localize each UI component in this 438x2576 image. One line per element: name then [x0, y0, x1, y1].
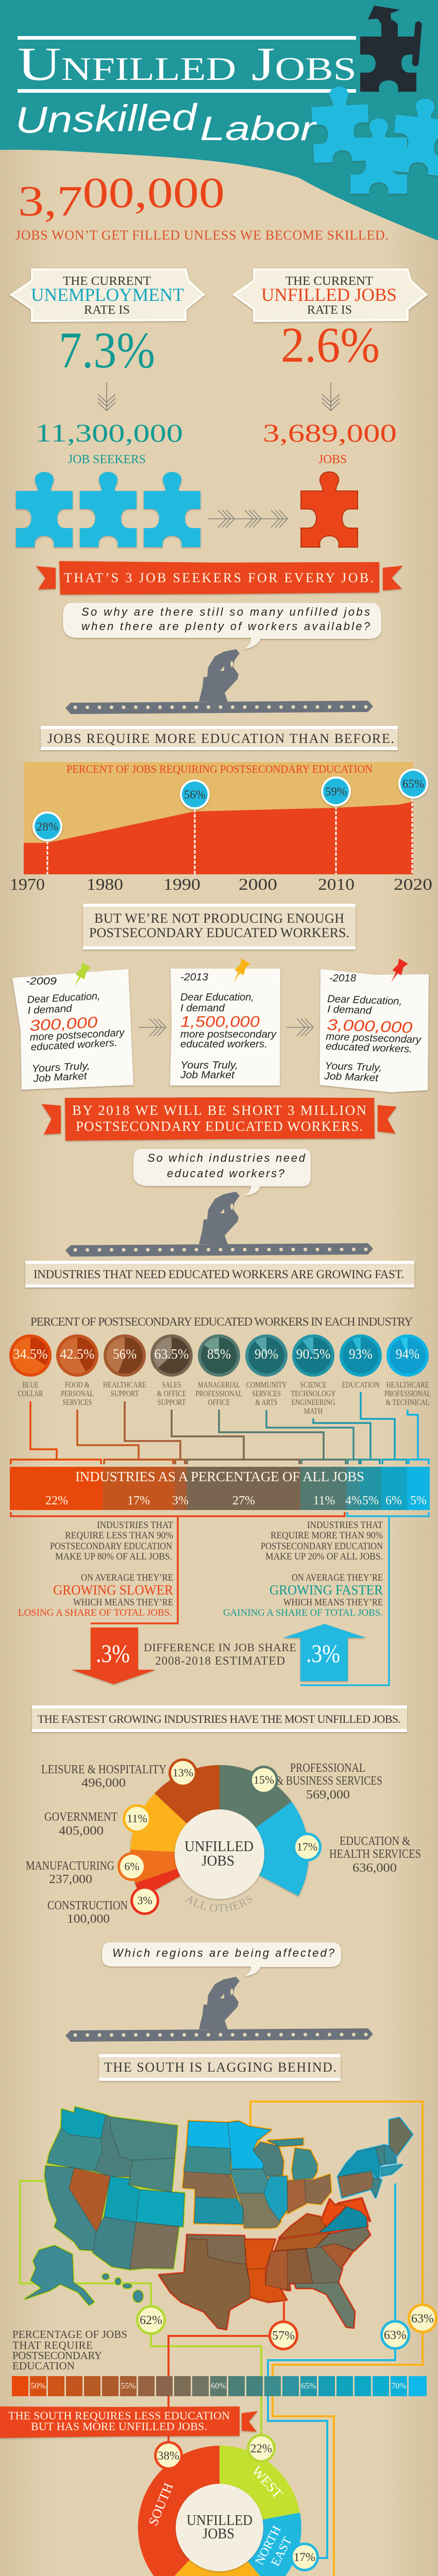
labels: 405,000 [59, 1824, 104, 1838]
panel: unfilled jobs rate [234, 269, 426, 466]
pie education: 93% [349, 1346, 373, 1362]
industry labels: SALES [162, 1381, 181, 1389]
heading: industries growing fast: INDUSTRIES THAT NEED EDUCATED WORKERS ARE GROWING FAST. [33, 1268, 404, 1281]
text: industries more than 90%: WHICH MEANS THEY’RE [283, 1597, 383, 1608]
connector: west [20, 2181, 261, 2435]
donut chart: unfilled jobs by industry: JOBS [201, 1853, 234, 1869]
note text: more postsecondary [180, 1029, 277, 1040]
text: industries less than 90%: INDUSTRIES THAT [97, 1520, 173, 1531]
bar title: INDUSTRIES AS A PERCENTAGE OF ALL JOBS [75, 1469, 364, 1484]
note text: I demand [327, 1004, 372, 1016]
arrow down [322, 383, 340, 411]
wedge northeast [220, 2513, 301, 2576]
note text: Dear Education, [180, 992, 254, 1003]
pie food: 42.5% [60, 1346, 95, 1362]
heading: south lagging: THE SOUTH IS LAGGING BEHIND. [104, 2060, 336, 2075]
map midwest region [183, 2121, 331, 2228]
note text: Yours Truly, [31, 1060, 90, 1075]
3,700,000: 3,7 [18, 177, 82, 225]
banner text: THAT’S 3 JOB SEEKERS FOR EVERY JOB. [64, 570, 374, 585]
map legend title: EDUCATION [12, 2360, 75, 2372]
badge: northeast 63% [380, 2320, 410, 2350]
teal curved panel [0, 0, 438, 241]
panel: unfilled jobs rate: UNFILLED JOBS [261, 284, 397, 305]
chart title: percent in each industry: PERCENT OF POSTSECONDARY EDUCATED WORKERS IN EACH INDUSTRY [30, 1315, 413, 1328]
note text: 1,500,000 [180, 1013, 260, 1030]
59% marker [321, 776, 351, 806]
text: industries less than 90%: WHICH MEANS THEY’RE [73, 1597, 173, 1608]
arrow down [98, 383, 115, 411]
centre text: UNFILLED [184, 1838, 254, 1855]
note: 2018 [319, 958, 429, 1092]
note text [324, 973, 422, 1084]
year axis: 1990 [163, 875, 200, 893]
title rule top [18, 36, 356, 40]
map legend scale: 70% [391, 2382, 407, 2391]
bracket: less than 90% [11, 1512, 345, 1623]
donut chart: unfilled jobs by industry [26, 1758, 421, 1926]
2.6%: 2.6% [281, 317, 380, 373]
connector: northeast [268, 2183, 395, 2558]
donut chart: unfilled jobs by industry: ALL OTHERS [185, 1895, 252, 1912]
note text: Yours Truly, [325, 1060, 382, 1074]
difference caption: 2008-2018 ESTIMATED [155, 1654, 285, 1667]
arrow right [208, 510, 288, 528]
17% badge: 17% [294, 2551, 315, 2564]
heading: jobs require more education [41, 726, 398, 750]
difference caption [144, 1641, 296, 1667]
heading: jobs require more education: JOBS REQUIRE MORE EDUCATION THAN BEFORE. [47, 731, 394, 746]
note: 2009 [12, 962, 133, 1090]
arrow note 2 to 3 [287, 1019, 313, 1036]
arrow down: -.3% [72, 1628, 156, 1684]
note text: Job Market [324, 1071, 379, 1084]
bubble text: Which regions are being affected? [112, 1946, 335, 1959]
text: industries less than 90%: POSTSECONDARY EDUCATION [50, 1541, 172, 1552]
industry labels: COMMUNITY [246, 1381, 287, 1389]
industry labels: FOOD & [65, 1381, 90, 1389]
panel: unfilled jobs rate: RATE IS [307, 303, 352, 317]
text: industries more than 90%: MAKE UP 20% OF ALL JOBS. [265, 1551, 383, 1562]
pie community [245, 1334, 288, 1377]
note text: 3,000,000 [327, 1016, 413, 1037]
note text: 300,000 [29, 1014, 98, 1035]
centre circle [176, 2484, 263, 2571]
map south region [159, 2198, 370, 2329]
speech bubble 2: educated workers? [167, 1167, 285, 1180]
labels: & BUSINESS SERVICES [276, 1774, 382, 1788]
bar values [45, 1494, 427, 1507]
note text: -2013 [180, 972, 208, 983]
note text: -2009 [26, 976, 57, 987]
28% marker [32, 811, 62, 841]
centre circle [175, 1809, 264, 1899]
thinker statue 2 [65, 1192, 373, 1257]
13% badge: 13% [173, 1766, 193, 1779]
pie food [56, 1334, 98, 1377]
heading: fastest growing: THE FASTEST GROWING INDUSTRIES HAVE THE MOST UNFILLED JOBS. [38, 1713, 401, 1725]
text: industries more than 90%: POSTSECONDARY EDUCATION [261, 1541, 383, 1552]
pie community: 90% [255, 1346, 278, 1362]
pie healthcare support [104, 1334, 146, 1377]
text: industries more than 90%: INDUSTRIES THAT [307, 1520, 383, 1531]
area chart: percent of jobs requiring postsecondary education [10, 762, 432, 893]
speech bubble 1 [63, 603, 381, 649]
note text: -2018 [329, 973, 356, 984]
bar values: 5% [410, 1494, 427, 1507]
11,300,000: 11,300,000 [35, 418, 183, 447]
donut chart: unfilled jobs by region [138, 2434, 319, 2576]
65% marker [398, 769, 428, 799]
dashed markers [47, 798, 412, 874]
note text [180, 972, 277, 1081]
labels: 237,000 [49, 1873, 92, 1886]
pie education [340, 1334, 382, 1377]
bar values: 17% [127, 1494, 150, 1507]
labels [26, 1761, 421, 1926]
note text: educated workers. [180, 1039, 267, 1050]
puzzle pieces blue [310, 85, 438, 194]
industry labels: PROFESSIONAL [196, 1389, 242, 1398]
text: industries less than 90%: REQUIRE LESS THAN 90% [65, 1530, 173, 1541]
donut chart: unfilled jobs by region: SOUTH [145, 2481, 176, 2528]
7.3%: 7.3% [59, 321, 155, 379]
panel: unemployment rate [11, 269, 204, 466]
pie healthcare support: 56% [113, 1346, 137, 1362]
banner: south requires less education: BUT HAS MORE UNFILLED JOBS. [31, 2420, 207, 2433]
bar values: 3% [172, 1494, 189, 1507]
sign text: THE CURRENT [63, 275, 151, 288]
38% badge: 38% [158, 2449, 179, 2462]
note text: Dear Education, [327, 993, 402, 1007]
note text: Job Market [32, 1071, 88, 1084]
bubble text: So which industries need [147, 1151, 306, 1164]
11% badge: 11% [127, 1812, 147, 1825]
13% badge [169, 1758, 197, 1787]
note: 2013 [170, 958, 280, 1086]
badge: midwest 63%: 63% [411, 2312, 434, 2326]
pie stem: 90.5% [296, 1346, 331, 1362]
6% badge: 6% [124, 1860, 140, 1873]
chart background [24, 762, 413, 874]
sign text: THE CURRENT [285, 275, 373, 288]
note text: educated workers. [326, 1041, 412, 1055]
red area [24, 802, 413, 874]
job seekers: JOB SEEKERS [68, 453, 146, 466]
speech bubble 3 [102, 1942, 341, 1976]
header: teal title panel [0, 0, 438, 241]
text: industries more than 90%: GROWING FASTER [269, 1582, 383, 1598]
heading: not producing enough [83, 904, 356, 950]
chart title: PERCENT OF JOBS REQUIRING POSTSECONDARY EDUCATION [66, 762, 373, 775]
pin red [386, 958, 408, 985]
industry labels: & OFFICE [157, 1389, 187, 1398]
wedge south [138, 2446, 220, 2576]
donut chart: unfilled jobs by region: NORTH [253, 2524, 284, 2567]
panel: unemployment rate: UNEMPLOYMENT [31, 284, 184, 305]
56% marker: 56% [184, 788, 206, 801]
banner: 3 job seekers [36, 561, 403, 595]
region labels: WEST [249, 2463, 286, 2502]
text: industries less than 90%: ON AVERAGE THEY’RE [81, 1572, 173, 1583]
pie healthcare professional: 94% [396, 1346, 419, 1362]
map legend title: POSTSECONDARY [12, 2349, 102, 2362]
industry labels: SCIENCE [300, 1381, 327, 1389]
28% marker: 28% [37, 820, 58, 833]
dark graduate puzzle piece [360, 6, 418, 92]
year axis: 1970 [10, 875, 45, 893]
note text [26, 976, 125, 1084]
note text: more postsecondary [29, 1027, 125, 1043]
map northeast region [338, 2118, 412, 2197]
banner text: BY 2018 WE WILL BE SHORT 3 MILLION [72, 1103, 366, 1118]
title rule bottom [18, 89, 356, 93]
pie healthcare professional [386, 1334, 429, 1377]
pie stem [292, 1334, 334, 1377]
panel: unemployment rate: RATE IS [84, 303, 130, 317]
industry labels: MANAGERIAL [198, 1381, 240, 1389]
red piece [301, 472, 358, 547]
stacked bar: industries as percentage of all jobs [10, 1467, 430, 1510]
map legend title: THAT REQUIRE [12, 2339, 93, 2351]
map legend title [12, 2328, 127, 2372]
banner: short 3 million: POSTSECONDARY EDUCATED WORKERS. [76, 1118, 363, 1134]
year axis: 1980 [87, 875, 123, 893]
heading: fastest growing [32, 1705, 407, 1732]
11% badge [123, 1804, 151, 1833]
industry labels: EDUCATION [342, 1381, 380, 1389]
speech bubble 1: when there are plenty of workers available? [81, 620, 370, 633]
sign left [11, 269, 204, 321]
industry labels: PERSONAL [61, 1389, 94, 1398]
pie row: industries [9, 1334, 429, 1377]
industry labels: SUPPORT [110, 1389, 139, 1398]
pin orange [229, 958, 250, 985]
heading: not producing enough: BUT WE’RE NOT PRODUCING ENOUGH [94, 911, 344, 926]
puzzle comparison [16, 472, 358, 547]
wedges [130, 1765, 309, 1897]
labels: 496,000 [81, 1776, 126, 1790]
difference caption: DIFFERENCE IN JOB SHARE [144, 1641, 296, 1654]
labels: LEISURE & HOSPITALITY [41, 1763, 166, 1776]
3,700,000: 00,000 [82, 169, 225, 217]
wedge west [220, 2446, 300, 2528]
pie blue collar [9, 1334, 52, 1377]
donut chart: unfilled jobs by region: EAST [269, 2535, 295, 2568]
arrow up: +.3% [283, 1624, 366, 1681]
bar values: 5% [362, 1494, 379, 1507]
badge: west 62% [136, 2305, 166, 2335]
3% badge: 3% [137, 1894, 153, 1907]
year axis [10, 875, 432, 893]
labels: EDUCATION & [340, 1835, 410, 1848]
6% badge [117, 1852, 146, 1881]
jobs: JOBS [318, 453, 347, 466]
bar values: 4% [345, 1494, 362, 1507]
industry labels: BLUE [23, 1381, 38, 1389]
note text: Yours Truly, [180, 1060, 238, 1071]
pie blue collar: 34.5% [13, 1346, 47, 1362]
all others curved label [175, 1891, 264, 1912]
title: Unfilled Jobs: U NFILLED J OBS [18, 38, 357, 90]
industry labels: SERVICES [252, 1389, 281, 1398]
pie managerial [198, 1334, 240, 1377]
heading: south lagging [99, 2054, 341, 2081]
thinker statue 3 [65, 1977, 373, 2042]
labels: 100,000 [67, 1912, 110, 1926]
text: industries less than 90%: GROWING SLOWER [53, 1582, 173, 1598]
industry labels: MATH [304, 1407, 323, 1416]
donut chart: unfilled jobs by region: JOBS [203, 2526, 234, 2542]
map legend scale: 65% [301, 2382, 316, 2391]
industry labels: & ARTS [256, 1398, 277, 1407]
pie sales [150, 1334, 193, 1377]
industry labels: ENGINEERING [292, 1398, 335, 1407]
headline caption: JOBS WON’T GET FILLED UNLESS WE BECOME SKILLED. [15, 228, 389, 243]
map west region [25, 2107, 184, 2305]
connector lines industries to bar [11, 1392, 429, 1464]
badge: northeast 63%: 63% [384, 2329, 407, 2342]
bubble text: So why are there still so many unfilled jobs [81, 605, 370, 618]
text: industries more than 90%: GAINING A SHARE OF TOTAL JOBS. [223, 1607, 383, 1618]
38% badge [154, 2441, 183, 2470]
pin green [70, 962, 91, 989]
subtitle: Unskilled: Unskilled [15, 97, 198, 141]
badge: south 57% [268, 2320, 298, 2350]
thinker statue 1 [65, 649, 373, 714]
labels: CONSTRUCTION [47, 1899, 128, 1912]
text: industries more than 90%: ON AVERAGE THEY’RE [292, 1572, 383, 1583]
centre text: UNFILLED [187, 2513, 252, 2529]
text: industries more than 90% [223, 1520, 383, 1618]
labels: 636,000 [352, 1861, 397, 1875]
wedge midwest [164, 2528, 272, 2576]
text: industries less than 90%: MAKE UP 80% OF ALL JOBS. [55, 1551, 172, 1562]
sign right [234, 269, 426, 321]
text: industries less than 90%: LOSING A SHARE OF TOTAL JOBS. [18, 1607, 172, 1618]
arrow down: -.3%: .3% [96, 1639, 130, 1668]
year axis: 2020 [394, 875, 432, 893]
badge: south 57%: 57% [272, 2329, 295, 2343]
note text: I demand [180, 1003, 225, 1014]
industry labels: SUPPORT [158, 1398, 186, 1407]
map legend scale: 50% [30, 2382, 46, 2391]
banner: short 3 million [42, 1097, 397, 1141]
connector: midwest [232, 2102, 423, 2576]
bar values: 6% [385, 1494, 402, 1507]
note text: more postsecondary [326, 1031, 422, 1045]
industry labels: SERVICES [63, 1398, 92, 1407]
subtitle: Labor: Labor [200, 109, 317, 147]
bar values: 11% [313, 1494, 335, 1507]
banner: south requires less education [0, 2406, 258, 2438]
heading: industries growing fast [25, 1261, 414, 1287]
year axis: 2000 [239, 875, 277, 893]
56% marker [180, 779, 210, 809]
industry labels: COLLAR [18, 1389, 43, 1398]
17% badge [293, 1833, 322, 1861]
bar values: 22% [45, 1494, 68, 1507]
connector: south [169, 2302, 284, 2442]
industry labels [18, 1381, 431, 1416]
22% badge: 22% [250, 2442, 272, 2455]
arrow note 1 to 2 [139, 1019, 166, 1036]
note text: Dear Education, [27, 991, 100, 1006]
3,689,000: 3,689,000 [263, 418, 397, 447]
map legend title: PERCENTAGE OF JOBS [12, 2328, 127, 2341]
17% badge: 17% [297, 1840, 317, 1853]
industry labels: HEALTHCARE [103, 1381, 146, 1389]
labels: HEALTH SERVICES [329, 1848, 421, 1861]
bracket: more than 90% [300, 1512, 429, 1685]
three blue pieces [16, 472, 200, 547]
note text: Job Market [180, 1070, 235, 1081]
heading: not producing enough: POSTSECONDARY EDUCATED WORKERS. [89, 925, 349, 940]
22% badge [247, 2434, 276, 2463]
pie sales: 63.5% [155, 1346, 189, 1362]
15% badge [249, 1766, 278, 1794]
banner text: THE SOUTH REQUIRES LESS EDUCATION [8, 2409, 230, 2422]
text: industries more than 90%: REQUIRE MORE THAN 90% [271, 1530, 383, 1541]
pie managerial: 85% [207, 1346, 231, 1362]
labels: GOVERNMENT [44, 1810, 117, 1824]
badge: west 62%: 62% [140, 2314, 162, 2327]
map legend scale: 60% [211, 2382, 226, 2391]
speech bubble 2 [133, 1149, 311, 1196]
17% badge [290, 2543, 319, 2571]
arrow up: +.3%: .3% [306, 1639, 340, 1668]
bar values: 27% [232, 1494, 255, 1507]
text: industries less than 90% [18, 1520, 173, 1618]
labels: MANUFACTURING [26, 1859, 114, 1873]
59% marker: 59% [325, 785, 347, 798]
labels: PROFESSIONAL [290, 1761, 365, 1775]
note text: I demand [27, 1003, 73, 1016]
year axis: 2010 [318, 875, 355, 893]
map legend scale: 55% [121, 2382, 136, 2391]
3% badge [130, 1886, 159, 1915]
industry labels: OFFICE [208, 1398, 230, 1407]
65% marker: 65% [402, 777, 424, 790]
map: United States by region [25, 2107, 412, 2329]
map legend scale [12, 2376, 427, 2396]
15% badge: 15% [254, 1773, 274, 1786]
badge: midwest 63% [408, 2303, 437, 2333]
labels: 569,000 [306, 1788, 350, 1802]
headline stat [15, 169, 389, 243]
industry labels: TECHNOLOGY [291, 1389, 336, 1398]
note text: educated workers. [30, 1037, 117, 1053]
